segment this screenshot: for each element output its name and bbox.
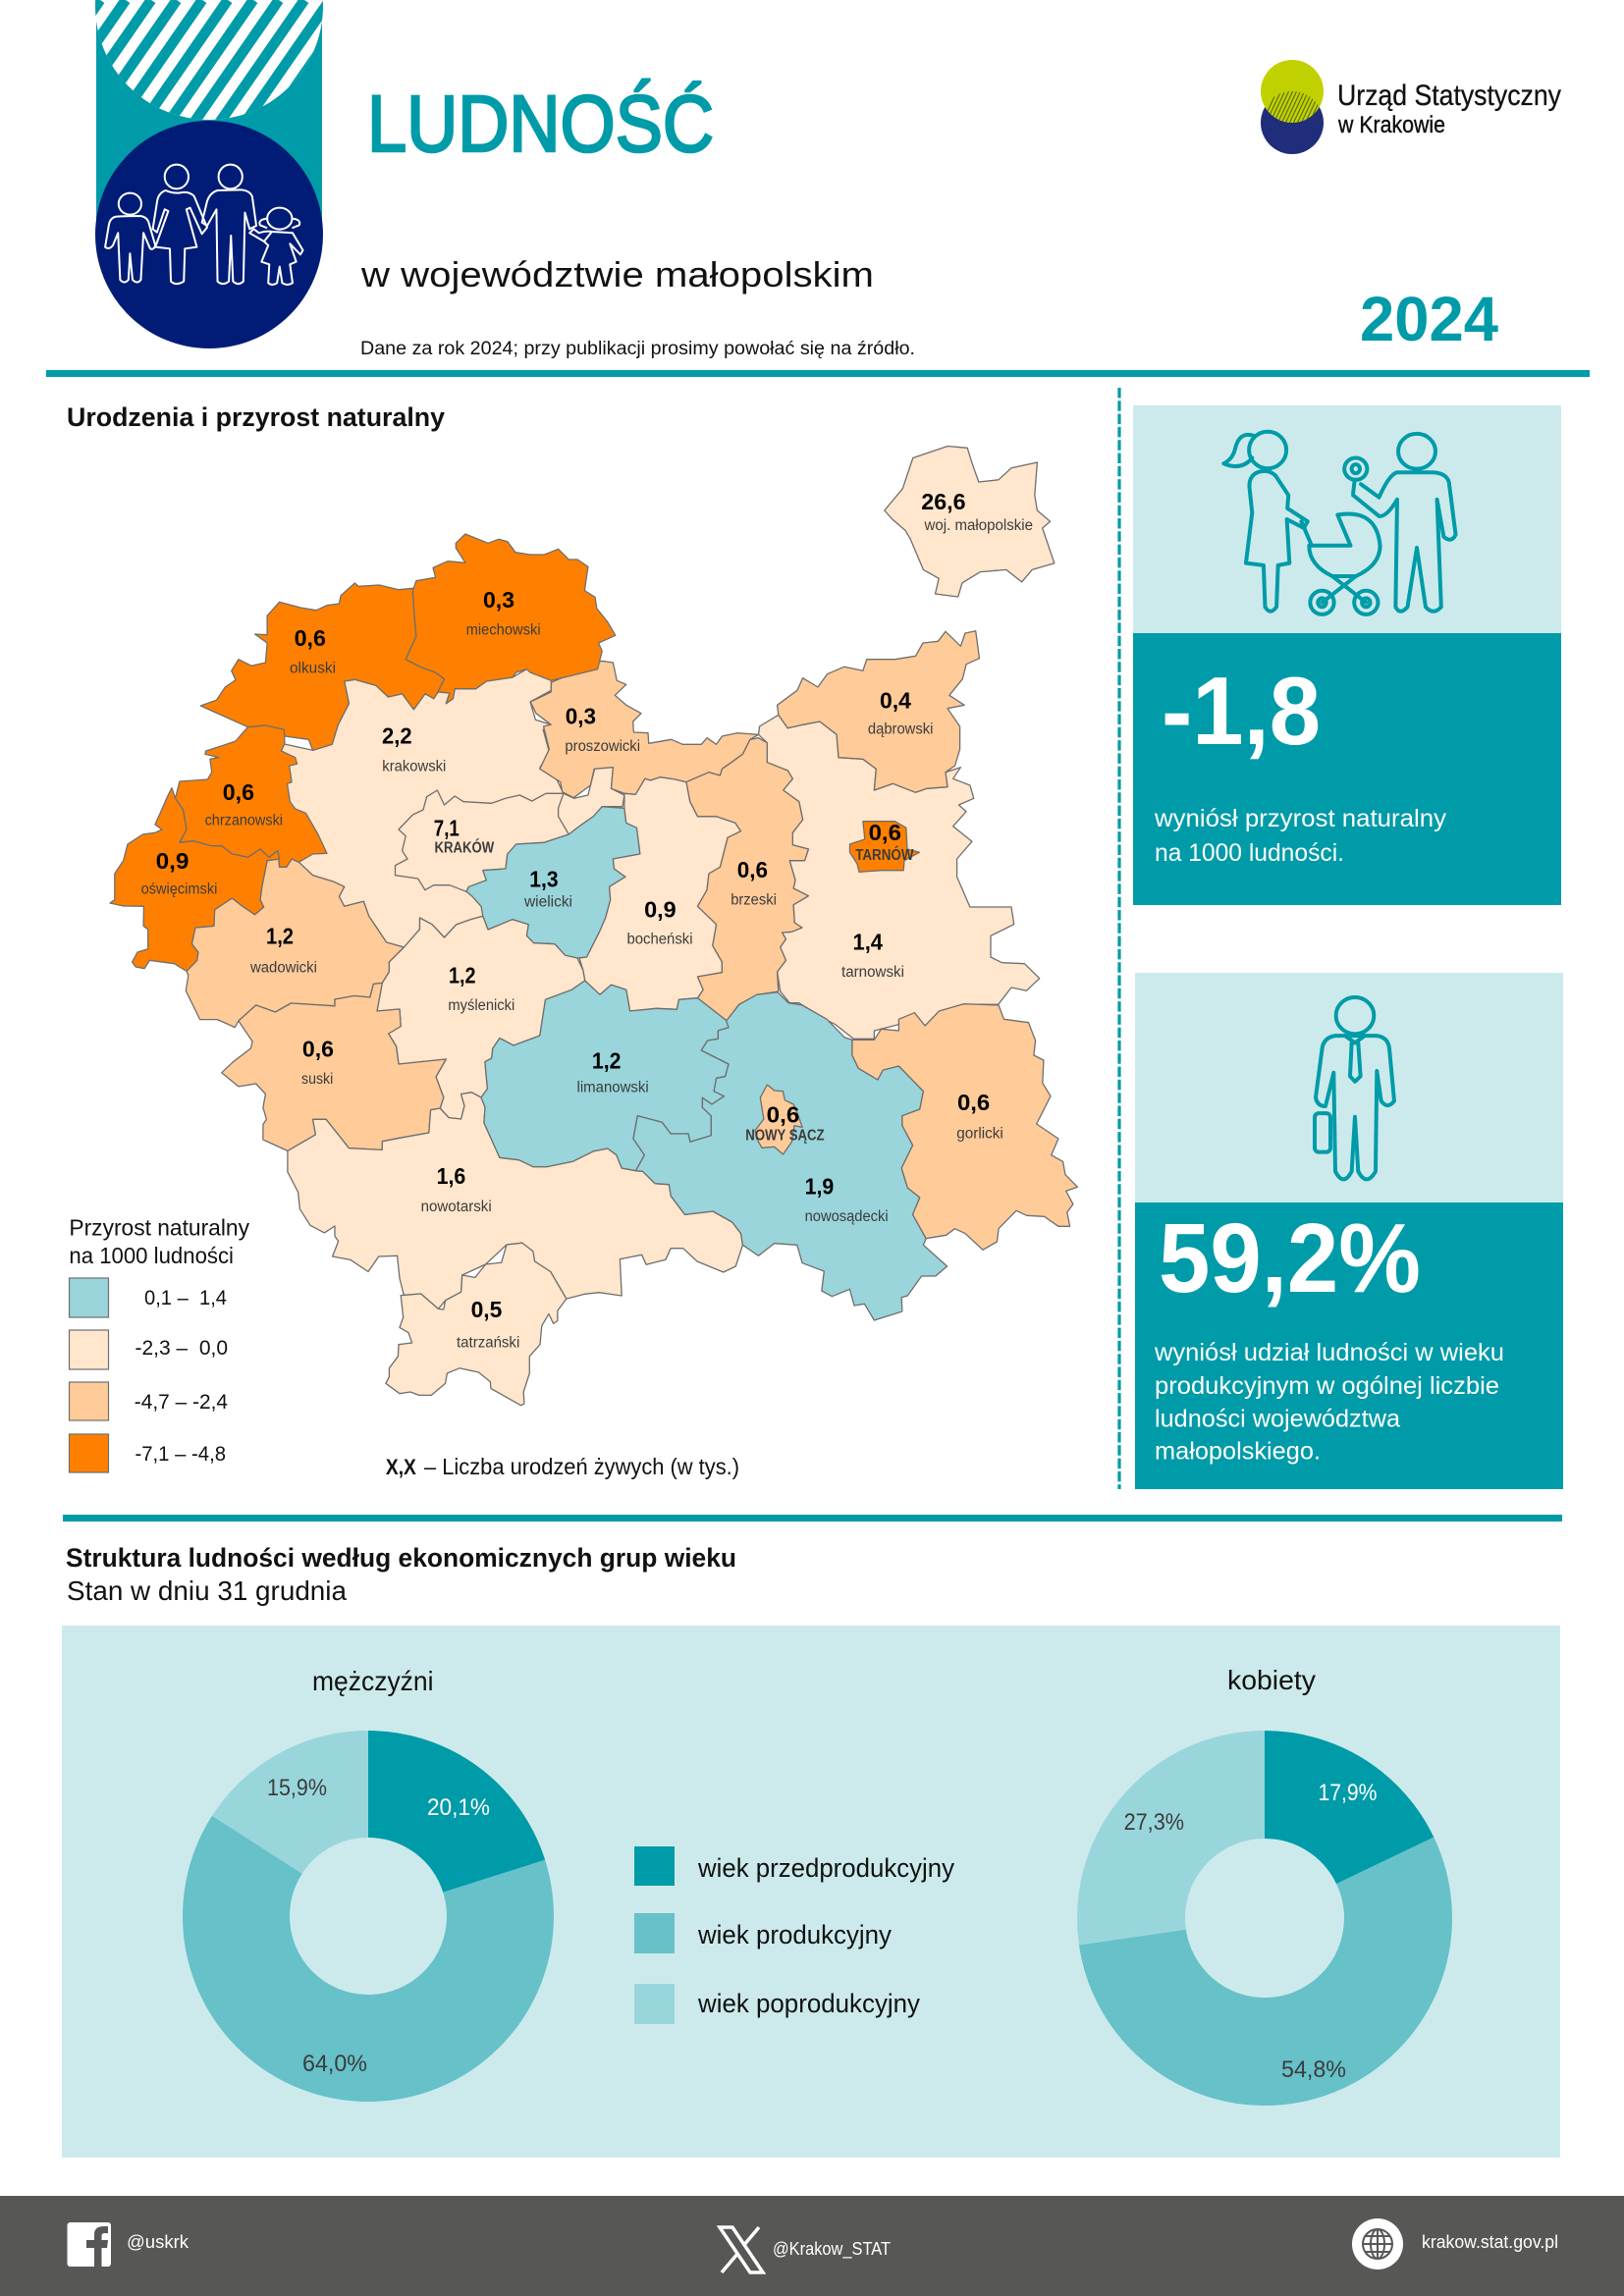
map labels: 0,6 [223,779,254,805]
logo: Urząd Statystyczny w Krakowie: w Krakowie [1337,112,1445,138]
donut chart: men: 64,0% [302,2051,367,2077]
map legend [69,1215,249,1472]
region: miechowski [406,534,616,704]
map labels: 0,5 [471,1297,503,1322]
region: tatrzański [386,1243,567,1406]
icon: parents with stroller [1223,432,1456,614]
description: produkcyjnym w ogólnej liczbie [1155,1372,1499,1400]
map labels: 1,2 [266,924,294,949]
map labels: woj. małopolskie [924,517,1033,534]
region: nowosądecki [633,992,947,1320]
map labels: 1,6 [437,1163,465,1189]
section heading: births: Urodzenia i przyrost naturalny [67,402,445,432]
map legend: -7,1 – -4,8 [135,1443,226,1466]
map labels: tarnowski [841,964,904,981]
region: wadowicki [186,859,404,1028]
region: krakowski [280,669,624,947]
map legend: -4,7 – -2,4 [135,1391,228,1414]
description: wyniósł udział ludności w wieku [1154,1339,1504,1366]
chart legend: wiek produkcyjny [697,1920,892,1949]
region: Kraków [395,790,568,891]
website: krakow.stat.gov.pl [1422,2232,1558,2252]
big number: 59,2% [1159,1203,1421,1313]
big number: -1,8 [1162,657,1321,765]
map labels: oświęcimski [141,881,217,898]
donut chart: men: 20,1% [427,1794,490,1821]
header emblem: hatched circle and family icon [95,0,323,348]
region: Nowy Sącz [755,1085,802,1154]
map labels: 0,6 [302,1037,334,1062]
panel: age structure charts [62,1626,1560,2158]
map labels: brzeski [731,892,777,909]
region: bocheński [579,777,740,1011]
map labels: krakowski [382,759,446,775]
map labels: 1,2 [592,1047,621,1073]
map labels: myślenicki [448,997,514,1014]
map labels: tatrzański [457,1334,519,1351]
map labels: 0,3 [566,703,596,728]
map labels: limanowski [577,1080,649,1096]
map labels: wielicki [523,893,572,910]
map legend: 0,1 – 1,4 [144,1287,227,1309]
map labels: wadowicki [249,960,317,977]
region: proszowicki [530,661,758,798]
section heading: age structure: Stan w dniu 31 grudnia [67,1575,347,1606]
map labels: gorlicki [956,1125,1003,1142]
handle: facebook: @uskrk [127,2232,189,2252]
chart legend: wiek poprodukcyjny [697,1989,920,2018]
description [1154,805,1447,867]
map labels: 0,6 [295,625,326,651]
map labels: 0,6 [957,1090,990,1115]
section heading: age structure: Struktura ludności według ekonomicznych grup wieku [66,1543,736,1573]
map labels: TARNÓW [855,846,914,864]
map labels: 1,3 [529,866,559,891]
map labels: 1,2 [449,963,476,988]
description: małopolskiego. [1155,1438,1321,1466]
map labels: nowotarski [421,1199,492,1215]
map labels: 2,2 [382,723,412,749]
map labels: 0,6 [737,857,768,882]
icon: family [105,165,303,285]
section heading: age structure [66,1543,736,1606]
map labels: 0,3 [483,587,514,613]
region: brzeski [686,738,808,1021]
map labels: 0,9 [644,896,677,922]
map labels: 0,6 [767,1101,799,1127]
region: myślenicki [377,916,585,1119]
donut chart: women: kobiety [1227,1665,1316,1695]
donut chart: men: 15,9% [267,1775,327,1801]
map labels: dąbrowski [868,721,933,738]
donut chart: women: 54,8% [1281,2056,1346,2083]
panel: working-age share [1135,973,1563,1489]
map legend: -2,3 – 0,0 [135,1337,228,1360]
chart legend: wiek przedprodukcyjny [697,1853,954,1883]
panel: natural increase [1133,405,1561,905]
handle: X: @Krakow_STAT [773,2239,891,2260]
donut chart: women: 17,9% [1318,1780,1377,1806]
map labels: 1,4 [852,929,883,954]
chart legend [634,1846,954,2024]
icon: facebook [67,2222,111,2267]
map note: births in thousands: X,X [386,1455,416,1479]
description: wyniósł przyrost naturalny [1154,805,1447,832]
map labels: 0,6 [869,820,901,845]
map labels: 0,4 [880,688,911,714]
map labels: 0,9 [156,848,189,874]
map labels: 26,6 [921,489,966,514]
choropleth map: poviats [110,446,1078,1406]
icon: globe [1352,2218,1403,2269]
dashed divider [1117,388,1121,1489]
map labels: nowosądecki [805,1208,889,1225]
map labels: chrzanowski [205,813,283,829]
map legend: na 1000 ludności [69,1243,234,1268]
donut chart: men [236,1666,501,2077]
region: olkuski [200,583,444,750]
donut chart: women [1124,1665,1398,2083]
map labels: NOWY SĄCZ [745,1128,825,1145]
region: chrzanowski [176,725,327,867]
map legend: Przyrost naturalny [69,1215,249,1241]
region: Tarnów [850,822,919,872]
map labels: olkuski [290,661,336,677]
map labels: suski [301,1071,333,1088]
title: LUDNOŚĆ [367,80,714,169]
region: dąbrowski [778,631,980,792]
map labels: KRAKÓW [434,838,495,856]
map labels: 7,1 [434,816,460,841]
map labels: miechowski [466,622,541,639]
region: limanowski [481,981,729,1171]
icon: X [720,2227,763,2272]
logo: Urząd Statystyczny w Krakowie: Urząd Statystyczny [1337,80,1561,112]
icon: person with briefcase [1315,997,1394,1179]
source note: Dane za rok 2024; przy publikacji prosimy powołać się na źródło. [360,339,915,359]
logo: Urząd Statystyczny w Krakowie [1261,60,1561,154]
region: tarnowski [758,715,1040,1039]
description: na 1000 ludności. [1155,839,1344,867]
section rule [63,1515,1562,1522]
region: suski [222,983,446,1150]
map labels: bocheński [626,932,693,948]
donut chart: men: mężczyźni [312,1666,434,1696]
map note: births in thousands: – Liczba urodzeń żywych (w tys.) [424,1454,739,1479]
region: nowotarski [288,1093,742,1308]
subtitle: w województwie małopolskim [360,254,874,294]
description: ludności województwa [1155,1406,1400,1433]
region: gorlicki [852,1004,1078,1250]
region: woj. małopolskie inset [885,446,1055,597]
footer [0,2196,1624,2296]
region: wielicki [466,807,640,958]
donut chart: women: 27,3% [1124,1809,1184,1836]
map labels [141,489,1033,1351]
map labels: proszowicki [565,738,640,755]
map labels: 1,9 [805,1174,834,1200]
region: oświęcimski [110,788,280,971]
year: 2024 [1360,284,1498,354]
description [1154,1339,1504,1466]
header rule [46,370,1590,377]
